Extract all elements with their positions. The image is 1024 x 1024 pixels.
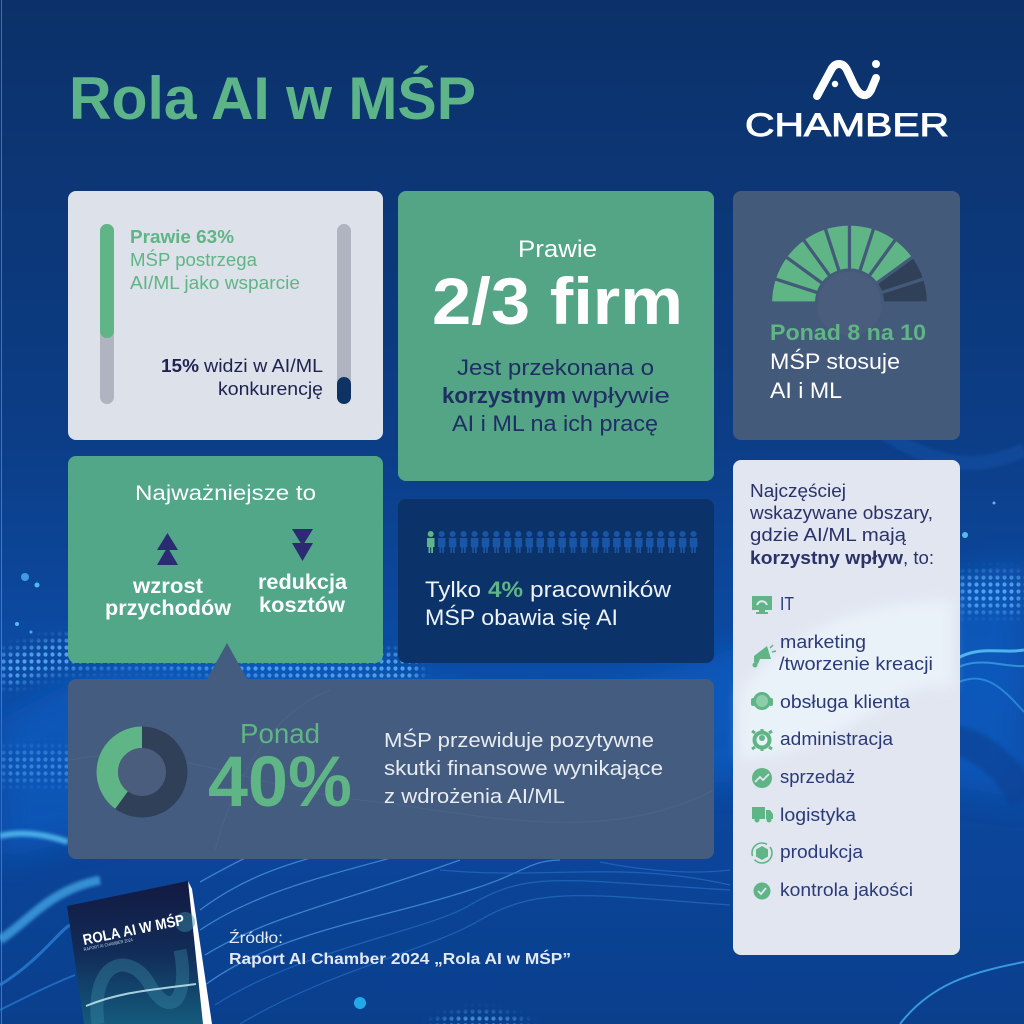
text: only 4% (425, 577, 671, 630)
text: only 4%: 4% (488, 577, 523, 602)
text: 63% support (130, 227, 300, 293)
text: intro: gdzie AI/ML mają (750, 525, 907, 545)
text: description: z wdrożenia AI/ML (384, 786, 565, 808)
text: 63% support: AI/ML jako wsparcie (130, 273, 300, 293)
label: cost reduction: redukcja (258, 571, 347, 594)
stat: 40%: 40% (208, 743, 352, 822)
list item: marketing (752, 632, 933, 674)
text: 63% support: Prawie 63% (130, 227, 234, 247)
text: description (442, 355, 670, 436)
text: intro: korzystny wpływ (750, 548, 904, 568)
left progress bar 63% (100, 224, 114, 404)
label: cost reduction: kosztów (259, 594, 346, 617)
text: intro (749, 481, 934, 568)
right progress bar 15% (337, 224, 351, 404)
list item: IT: IT (780, 594, 794, 614)
label: revenue growth: wzrost (132, 575, 203, 598)
text: description: korzystnym (442, 383, 566, 408)
panel: gauge 8 of 10 (733, 191, 960, 440)
text: 15% competition: widzi w AI/ML (203, 356, 323, 376)
text: description: skutki finansowe wynikające (384, 758, 663, 780)
text: Prawie: Prawie (518, 236, 597, 263)
gauge chart (770, 224, 928, 336)
report cover: RAPORT AI CHAMBER 2024 (83, 937, 134, 952)
text: description: AI i ML na ich pracę (452, 411, 658, 436)
label: revenue growth: przychodów (105, 597, 232, 620)
panel: benefit areas (733, 460, 960, 955)
label: cost reduction (258, 571, 347, 617)
report cover: ROLA AI W MŚP (81, 911, 186, 949)
text: only 4%: pracowników (530, 577, 671, 602)
text: only 4%: MŚP obawia się AI (425, 605, 618, 630)
logo: AI Chamber: CHAMBER (745, 107, 949, 143)
list item: administration: administracja (780, 729, 894, 749)
list item: production (752, 842, 864, 863)
text: 8 of 10: MŚP stosuje (770, 349, 900, 374)
list item: sales (752, 767, 855, 788)
source note: Raport AI Chamber 2024 „Rola AI w MŚP” (229, 949, 571, 968)
text: only 4%: Tylko (425, 577, 481, 602)
list item: logistics (752, 805, 857, 825)
text: Ponad: Ponad (240, 718, 320, 749)
text: 15% competition (161, 356, 323, 399)
text: 8 of 10 (770, 320, 926, 403)
list item: production: produkcja (780, 842, 864, 862)
pictogram: 25 employees (427, 531, 697, 553)
list item: administration (752, 729, 894, 751)
panel: 4% employees (398, 499, 714, 663)
icon: double down arrow (292, 529, 313, 561)
panel: 2/3 firm (398, 191, 714, 481)
text: description: MŚP przewiduje pozytywne (384, 728, 654, 752)
text: 8 of 10: Ponad 8 na 10 (770, 320, 926, 345)
stat: 2/3 firm: 2/3 firm (432, 264, 683, 338)
text: 63% support: MŚP postrzega (130, 249, 258, 270)
list item: customer service: obsługa klienta (780, 692, 911, 712)
text: intro: wskazywane obszary, (749, 503, 933, 523)
panel: over 40% (68, 643, 714, 859)
logo: AI Chamber (745, 60, 949, 143)
title: Rola AI w MŚP (69, 65, 476, 132)
label: revenue growth (105, 575, 232, 620)
icon: double up arrow (157, 533, 178, 565)
list item: IT (752, 594, 794, 614)
list item: logistics: logistyka (780, 805, 857, 825)
heading: Najważniejsze to (135, 482, 316, 505)
panel: perception bars (68, 191, 383, 440)
text: description: Jest przekonana o (457, 355, 654, 380)
text: 15% competition: 15% (161, 356, 199, 376)
text: description (384, 728, 663, 808)
source note (229, 928, 571, 968)
list item: sales: sprzedaż (780, 767, 855, 787)
text: description: wpływie (571, 383, 670, 408)
text: 8 of 10: AI i ML (770, 378, 842, 403)
source note: Źródło: (229, 928, 283, 947)
panel: most important (68, 456, 383, 663)
list item: marketing: marketing (780, 632, 866, 652)
text: intro: Najczęściej (750, 481, 846, 501)
report cover (67, 881, 212, 1024)
text: 15% competition: konkurencję (218, 379, 323, 399)
donut chart (96, 726, 188, 818)
text: intro: , to: (903, 548, 934, 568)
list item: quality control: kontrola jakości (780, 880, 913, 900)
list item: marketing: /tworzenie kreacji (779, 654, 933, 674)
